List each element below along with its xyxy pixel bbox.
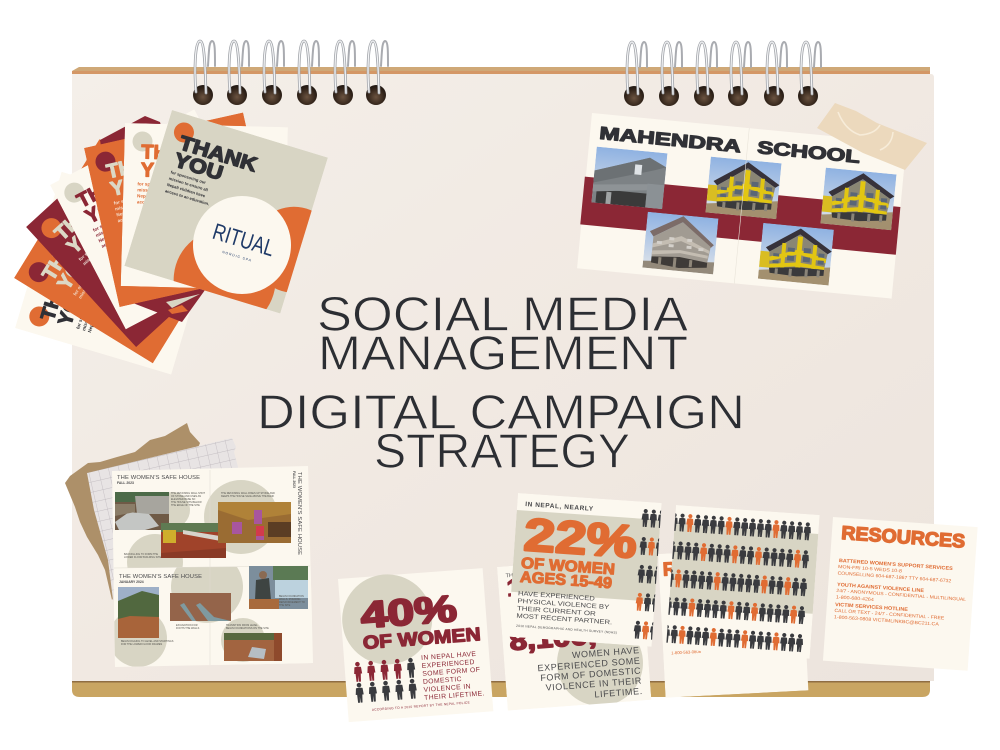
description: VIOLENCE IN THEIR bbox=[545, 675, 642, 693]
resource: victim services: 1-800-563-0808 VICTIMLINKBC@BC211.CA bbox=[834, 614, 940, 627]
resource: battered women's services bbox=[837, 558, 954, 583]
card: orange upper bbox=[84, 112, 246, 307]
spiral binding right bbox=[624, 42, 821, 106]
card: white dark text: for sponsoring our bbox=[75, 289, 92, 330]
photo captions: WALLS. POURING bbox=[279, 598, 300, 601]
big digit fragment: 1 bbox=[506, 574, 521, 602]
card: orange upper: Nepali children have bbox=[116, 203, 161, 217]
photo: yellow building with shop bbox=[820, 168, 897, 230]
orange circle accent bbox=[174, 122, 194, 142]
heading: RESOURCES bbox=[841, 523, 966, 553]
notebook page bbox=[72, 74, 934, 681]
people icons bbox=[353, 658, 417, 703]
pictogram rows bbox=[662, 513, 812, 652]
resource: victim services: CALL OR TEXT - 24/7 - CONFIDENTIAL - FREE bbox=[834, 608, 944, 620]
card: hidden burgundy and sage corners bbox=[100, 116, 205, 322]
resource: battered women's services: COUNSELLING 604-687-1867 TTY 604-687-6732 bbox=[837, 570, 952, 583]
vertical heading: THE WOMEN'S SAFE HOUSE bbox=[296, 472, 302, 555]
resource: youth against violence: 1-800-680-4264 bbox=[836, 594, 875, 602]
subheading: OF WOMEN bbox=[362, 623, 481, 653]
card: front thank you Ritual: YOU bbox=[171, 149, 226, 185]
subheading bbox=[520, 557, 615, 589]
heading: fall 2023 bbox=[117, 475, 200, 485]
panel: 22 percent card bbox=[508, 493, 666, 647]
panel: 40 percent card bbox=[338, 567, 493, 722]
photo captions: REINFORCEMENT TO bbox=[279, 601, 305, 604]
description: VIOLENCE IN bbox=[423, 683, 471, 694]
card: orange upper: access to an education. bbox=[117, 207, 169, 223]
card: white burgundy text bbox=[50, 110, 198, 330]
description: DOMESTIC bbox=[423, 676, 462, 686]
description: THEIR LIFETIME. bbox=[424, 690, 485, 702]
thank you message: for sponsoring our bbox=[170, 169, 207, 185]
photo captions: FOOTS THE WALLS bbox=[176, 627, 200, 630]
title: STRATEGY bbox=[374, 426, 630, 478]
photo: concrete building bbox=[592, 146, 668, 210]
resource: youth against violence bbox=[836, 582, 967, 608]
heading: thank you: THANK bbox=[177, 132, 260, 177]
page folds bbox=[114, 470, 310, 665]
panel: resources card behind bbox=[658, 547, 808, 698]
description: FORM OF DOMESTIC bbox=[540, 665, 642, 683]
heading bbox=[599, 122, 861, 168]
description: SOME FORM OF bbox=[422, 667, 481, 678]
photo captions bbox=[121, 492, 305, 646]
people icons bbox=[634, 509, 662, 640]
logo: Ritual: RITUAL bbox=[210, 218, 278, 261]
panel: Women's Safe House bbox=[109, 466, 313, 667]
photo: trench foundation bbox=[170, 593, 231, 621]
card: burgundy: THANK bbox=[51, 181, 118, 245]
description: THEIR CURRENT OR bbox=[517, 605, 596, 618]
description: LIFETIME. bbox=[594, 686, 643, 700]
resource: youth against violence: 24/7 - ANONYMOUS - CONFIDENTIAL - MULTILINGUAL bbox=[836, 588, 967, 602]
sage circle bbox=[339, 571, 435, 668]
card: white burgundy text: THANK bbox=[73, 160, 146, 213]
heading: MAHENDRA bbox=[599, 123, 742, 156]
thank you message bbox=[165, 170, 209, 206]
description: PHYSICAL VIOLENCE BY bbox=[517, 598, 610, 611]
photo: yellow building bbox=[706, 157, 782, 219]
description: EXPERIENCED SOME bbox=[537, 656, 641, 673]
description: IN NEPAL HAVE bbox=[421, 651, 477, 662]
bottom page circles bbox=[114, 567, 264, 666]
hotline text: 1-800-563-0808 bbox=[671, 649, 702, 655]
photo: worker with water bbox=[249, 566, 308, 609]
card: white burgundy text: access to an education. bbox=[100, 220, 149, 249]
card: orange: for sponsoring our bbox=[72, 259, 98, 297]
card: burgundy: for sponsoring our bbox=[78, 230, 112, 262]
description: MOST RECENT PARTNER. bbox=[516, 613, 613, 626]
vertical heading: FALL 2023 bbox=[292, 471, 296, 488]
photo captions: KEEPS THE HOUSE SAFE ABOVE THE BANK bbox=[221, 495, 274, 498]
photo: hillside bbox=[118, 587, 159, 638]
photo captions: THE SITE bbox=[279, 604, 291, 607]
heading: january 2024: THE WOMEN'S SAFE HOUSE bbox=[119, 574, 202, 580]
panel: 8,100 women card bbox=[497, 556, 652, 713]
resource: battered women's services: BATTERED WOMEN'S SUPPORT SERVICES bbox=[839, 558, 954, 572]
intro text: THE bbox=[506, 573, 517, 579]
subheading: AGES 15-49 bbox=[520, 569, 613, 592]
photo captions: BACKFILLING TO FORM THE bbox=[124, 553, 158, 556]
photo captions: TRANSITION FROM LEVEL bbox=[226, 624, 258, 627]
notebook backing board bbox=[72, 67, 930, 697]
heading fragment: RESOURCES bbox=[662, 553, 784, 581]
title: MANAGEMENT bbox=[318, 328, 688, 380]
heading: january 2024 bbox=[119, 574, 202, 584]
card: white orange text: for sponsoring our bbox=[137, 181, 179, 187]
description bbox=[516, 590, 614, 626]
photo captions: THE RETAINING WALL SHOT bbox=[171, 492, 206, 495]
resource: victim services: VICTIM SERVICES HOTLINE bbox=[835, 602, 909, 613]
card: orange upper: YOU bbox=[108, 170, 156, 201]
subheading: OF WOMEN bbox=[521, 555, 615, 578]
photo captions: BEGIN DIGGING TO LEVEL AND STARTINGS bbox=[121, 640, 174, 643]
card: orange: THANK bbox=[38, 213, 94, 284]
hotline text bbox=[672, 650, 701, 654]
photo: trench workers bbox=[218, 502, 291, 543]
resource: victim services bbox=[834, 602, 945, 627]
card: orange: mission to ensure all bbox=[77, 258, 106, 300]
notebook bbox=[72, 67, 934, 697]
photo: digger bbox=[161, 523, 226, 558]
description: WOMEN HAVE bbox=[572, 645, 640, 660]
photo: grey building bbox=[642, 212, 718, 274]
photo captions: EXCAVATION FOR bbox=[176, 624, 198, 627]
orange semicircles bbox=[174, 206, 312, 310]
photo: yellow building side bbox=[758, 223, 834, 285]
statistic: 40% bbox=[359, 588, 458, 636]
photo captions: THE HOUSE SITS BELOW bbox=[171, 501, 202, 504]
photo captions: FOR THE LOWER FLOOR FRAMES bbox=[121, 643, 163, 646]
card: orange bbox=[14, 139, 179, 364]
card: burgundy bbox=[26, 198, 169, 347]
card: orange upper: THANK bbox=[105, 146, 178, 183]
card: white burgundy text: for sponsoring our bbox=[92, 209, 131, 233]
photo captions: THE RETAINING WALL RISES UP STONE AND bbox=[221, 492, 275, 495]
card: white orange text: Nepali children have bbox=[137, 193, 182, 200]
lead-in: IN NEPAL, NEARLY bbox=[525, 501, 594, 513]
bottom page bbox=[114, 568, 176, 590]
burgundy band bbox=[580, 177, 900, 255]
grid paper bbox=[87, 438, 238, 600]
card: front thank you Ritual bbox=[124, 110, 328, 314]
sage band bbox=[511, 510, 660, 602]
source: ACCORDING TO A 2020 REPORT BY THE NEPAL POLICE bbox=[372, 700, 470, 712]
card: orange upper: mission to ensure all bbox=[115, 197, 160, 212]
spiral binding left bbox=[193, 41, 388, 105]
torn kraft paper bbox=[65, 423, 200, 600]
top page circles bbox=[127, 480, 275, 568]
card: white dark text bbox=[15, 172, 190, 374]
sage band bbox=[669, 524, 818, 614]
card: white burgundy text: mission to ensure all bbox=[95, 213, 138, 238]
photo captions: BEGIN FOUNDATIONS ON THE SITE bbox=[226, 627, 269, 630]
masking tape bbox=[817, 103, 927, 170]
description bbox=[538, 646, 642, 698]
card: orange upper: for sponsoring our bbox=[113, 192, 155, 206]
heading: fall 2023: FALL 2023 bbox=[117, 481, 134, 485]
card: white orange text: mission to ensure all bbox=[137, 187, 183, 194]
photo: site overview bbox=[224, 633, 282, 661]
card: burgundy: mission to ensure all bbox=[82, 232, 119, 266]
panel: people pictogram card bbox=[662, 505, 820, 659]
vertical heading bbox=[292, 471, 302, 555]
photo captions: ELEVATED BASE SO bbox=[171, 498, 195, 501]
card: white dark text: THANK bbox=[37, 249, 78, 323]
source: 2016 NEPAL DEMOGRAPHIC AND HEALTH SURVEY (NDHS) bbox=[516, 624, 617, 635]
description bbox=[421, 650, 485, 702]
title: SOCIAL MEDIA bbox=[317, 288, 688, 342]
cream circle bbox=[193, 196, 291, 294]
card: white dark text: mission to ensure all bbox=[81, 286, 99, 331]
photo captions: LOWER FLOOR BUILDING SITE bbox=[124, 556, 162, 559]
card: white orange text: access to an education. bbox=[137, 199, 189, 206]
panel: Mahendra School bbox=[576, 113, 907, 299]
card: white orange text: YOU bbox=[140, 159, 184, 183]
statistic: 22% bbox=[522, 508, 639, 568]
card: white orange text: THANK bbox=[141, 141, 212, 165]
photo captions: BEGIN FOUNDATION bbox=[279, 595, 304, 598]
card: orange: YOU bbox=[54, 245, 95, 294]
photo: stone wall bbox=[115, 492, 169, 530]
card: white burgundy text: YOU bbox=[82, 189, 130, 228]
description: EXPERIENCED bbox=[422, 659, 475, 670]
description: HAVE EXPERIENCED bbox=[518, 590, 595, 603]
panel: resources card bbox=[823, 517, 978, 671]
card: white orange text bbox=[121, 123, 288, 290]
photo captions: THE EDGE OF THE SITE bbox=[171, 504, 200, 507]
resource: battered women's services: MON-FRI 10-5 WEDS 10-8 bbox=[838, 564, 903, 573]
statistic: 8,100, bbox=[508, 620, 597, 656]
thank you message: Nepali children have bbox=[166, 182, 207, 199]
card: burgundy: YOU bbox=[63, 213, 110, 258]
heading: fall 2023: THE WOMEN'S SAFE HOUSE bbox=[117, 475, 200, 481]
thank you message: mission to ensure all bbox=[168, 176, 209, 192]
title: DIGITAL CAMPAIGN bbox=[257, 386, 745, 440]
card: white dark text: YOU bbox=[54, 280, 88, 328]
card: white dark text: Nepali children have bbox=[87, 288, 105, 333]
heading: SCHOOL bbox=[757, 137, 861, 167]
card: white burgundy text: Nepali children have bbox=[98, 218, 140, 244]
panel: thank you card fan bbox=[14, 110, 328, 374]
heading: january 2024: JANUARY 2024 bbox=[119, 580, 144, 584]
title bbox=[257, 288, 745, 478]
thank you message: access to an education. bbox=[164, 188, 210, 206]
photo captions: OF STONE AND USES AN bbox=[171, 495, 201, 498]
sage circle bbox=[557, 640, 643, 704]
logo subtitle: NORDIC SPA bbox=[222, 250, 252, 263]
hotline text: CALL OR TEXT bbox=[671, 642, 701, 648]
resource: youth against violence: YOUTH AGAINST VIOLENCE LINE bbox=[837, 582, 925, 594]
